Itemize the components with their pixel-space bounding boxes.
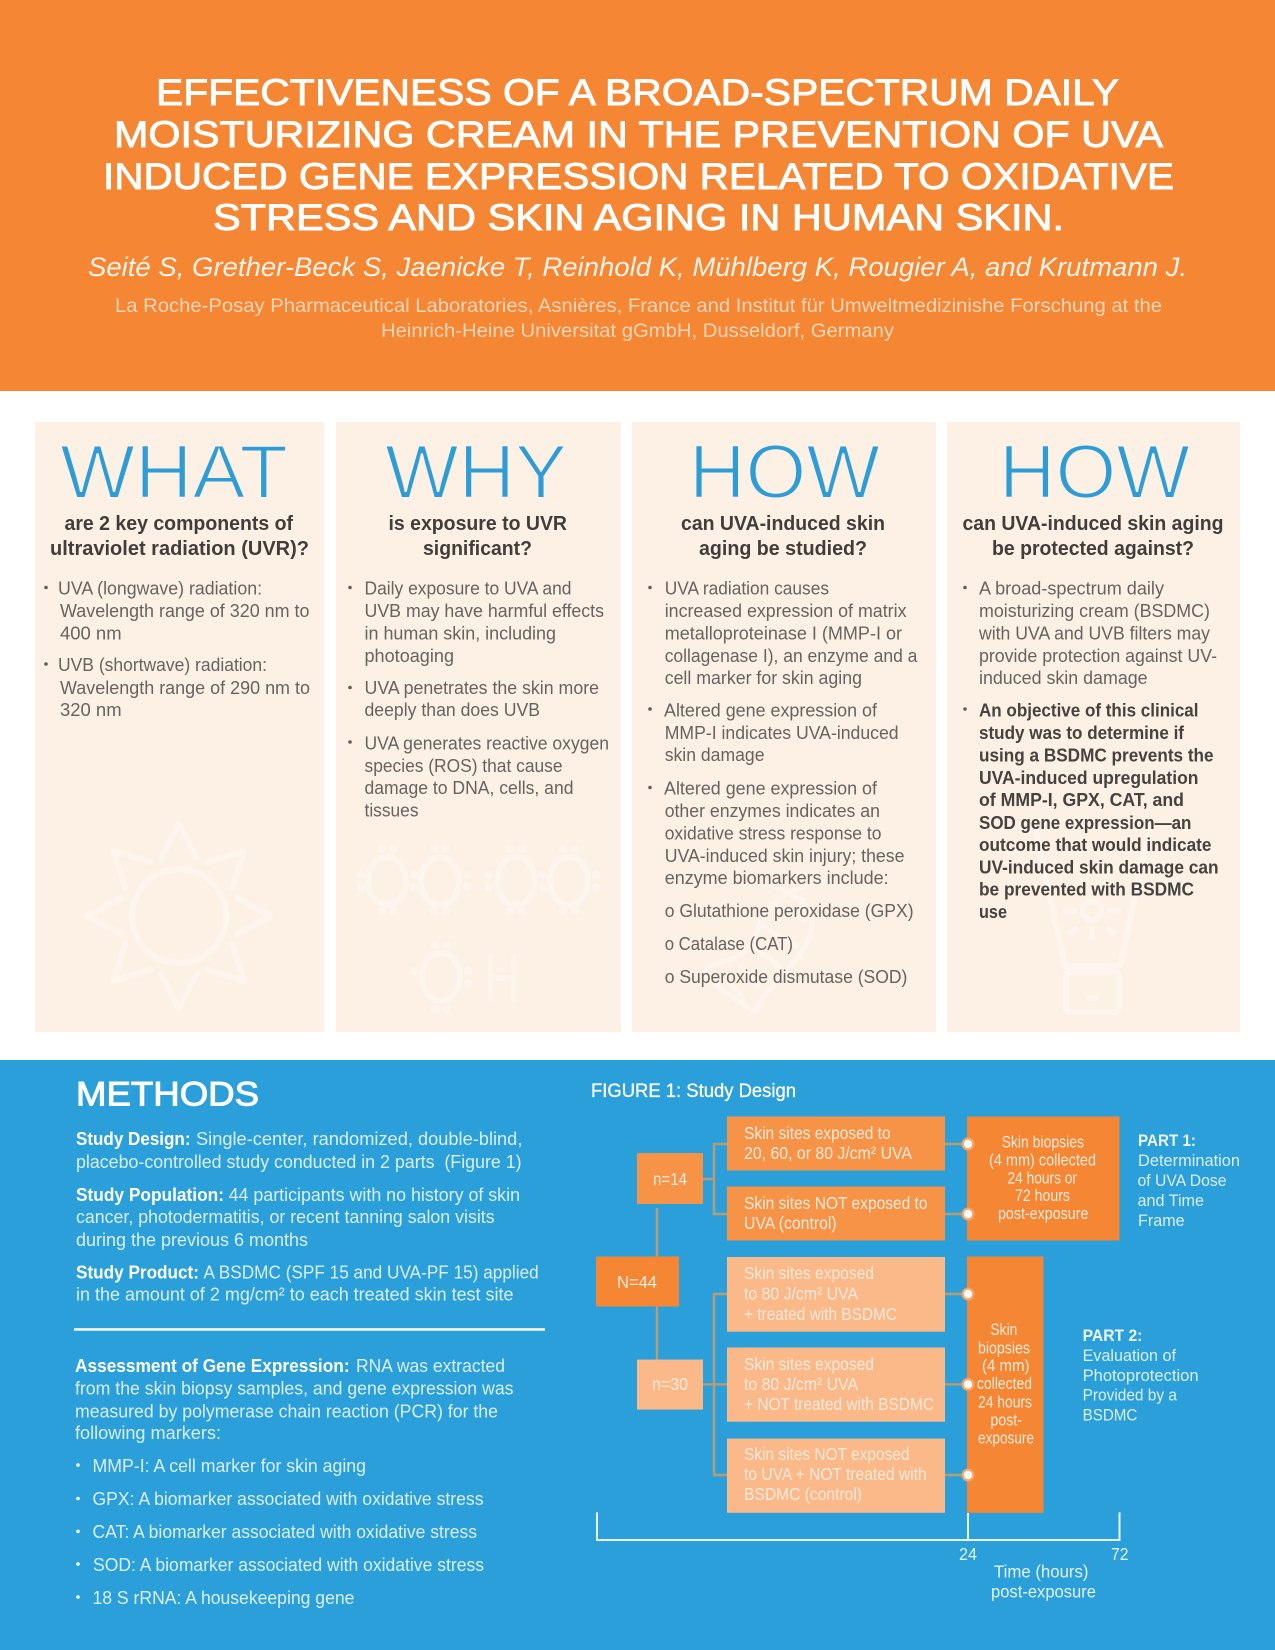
header banner xyxy=(0,0,1275,391)
icon: oxygen and hydroxyl molecules: H xyxy=(484,941,520,1017)
bullet list: 320 nm xyxy=(60,699,122,720)
bullet list: An objective of this clinical xyxy=(979,700,1198,720)
bullet list: enzyme biomarkers include: xyxy=(665,867,889,888)
bullet list: damage to DNA, cells, and xyxy=(364,777,574,798)
box: part 2 biopsies: (4 mm) xyxy=(982,1357,1030,1375)
bullet list: UVA-induced skin injury; these xyxy=(665,845,904,866)
label: part 1 xyxy=(1138,1132,1240,1230)
study product: A BSDMC (SPF 15 and UVA-PF 15) applied xyxy=(204,1262,539,1282)
heading: why: WHY xyxy=(385,430,567,515)
box: part 2 biopsies xyxy=(967,1256,1044,1513)
heading: how: HOW xyxy=(689,430,880,515)
label: part 2: BSDMC xyxy=(1083,1406,1137,1424)
bullet list: UVA-induced upregulation xyxy=(979,767,1198,788)
label: part 2: Photoprotection xyxy=(1083,1367,1199,1385)
bullet list: tissues xyxy=(364,800,418,820)
icon: oxygen and hydroxyl molecules xyxy=(357,845,600,1017)
bullet list: SOD gene expression—an xyxy=(979,812,1191,833)
heading: how: HOW xyxy=(999,430,1190,515)
bullet list xyxy=(44,578,310,720)
box: part 2 biopsies: Skin xyxy=(990,1321,1017,1339)
connector dots xyxy=(962,1138,974,1482)
panel: how studied xyxy=(632,422,936,1032)
subheading xyxy=(388,513,568,560)
box: not treated with BSDMC: to 80 J/cm² UVA xyxy=(744,1374,858,1394)
bullet list: skin damage xyxy=(665,744,764,765)
box: exposed doses xyxy=(727,1116,945,1170)
title: EFFECTIVENESS OF A BROAD-SPECTRUM DAILY xyxy=(156,72,1119,113)
label: part 2: Evaluation of xyxy=(1083,1347,1176,1365)
title: MOISTURIZING CREAM IN THE PREVENTION OF UVA xyxy=(114,114,1163,155)
bullet list: Altered gene expression of xyxy=(664,778,878,798)
box: part 1 biopsies: 24 hours or xyxy=(1008,1169,1077,1187)
bullet list: oxidative stress response to xyxy=(665,822,882,844)
label: part 1: Frame xyxy=(1138,1212,1185,1230)
icon: sun xyxy=(87,824,271,1008)
box: not treated with BSDMC xyxy=(727,1348,945,1422)
authors: Seité S, Grether-Beck S, Jaenicke T, Reinhold K, Mühlberg K, Rougier A, and Krutmann J. xyxy=(88,252,1187,282)
box: n=14 xyxy=(637,1153,703,1204)
bullet list: induced skin damage xyxy=(979,667,1148,688)
bullet list: o Glutathione peroxidase (GPX) xyxy=(665,900,914,921)
bullet list: provide protection against UV- xyxy=(979,645,1217,666)
label: part 1: Determination xyxy=(1138,1152,1240,1170)
bullet list xyxy=(348,578,609,820)
heading: what: WHAT xyxy=(60,430,288,515)
study product: in the amount of 2 mg/cm² to each treated skin test site xyxy=(76,1284,514,1305)
bullet list: study was to determine if xyxy=(979,722,1185,743)
box: n=14: n=14 xyxy=(653,1169,687,1189)
box: not exposed control: UVA (control) xyxy=(744,1213,837,1233)
box: treated with BSDMC xyxy=(727,1257,945,1332)
marker list: 18 S rRNA: A housekeeping gene xyxy=(92,1587,354,1608)
bullet list: be prevented with BSDMC xyxy=(979,878,1194,900)
study population: 44 participants with no history of skin xyxy=(229,1184,520,1205)
study population xyxy=(76,1184,520,1250)
time axis: 72 xyxy=(1111,1544,1128,1564)
box: n=30: n=30 xyxy=(652,1374,688,1394)
subheading: aging be studied? xyxy=(699,538,867,560)
assessment of gene expression: measured by polymerase chain reaction (PCR) for the xyxy=(75,1400,498,1421)
subheading: is exposure to UVR xyxy=(388,513,568,535)
bullet list: 400 nm xyxy=(60,622,122,644)
study design xyxy=(76,1128,522,1172)
box: part 1 biopsies xyxy=(967,1116,1120,1240)
label: part 1: and Time xyxy=(1138,1192,1204,1210)
affiliations: Heinrich-Heine Universitat gGmbH, Dusseldorf, Germany xyxy=(381,320,894,342)
box: untreated control: to UVA + NOT treated with xyxy=(744,1464,927,1484)
bullet list: Wavelength range of 320 nm to xyxy=(60,600,310,621)
study population: Study Population: xyxy=(76,1184,224,1205)
subheading: can UVA-induced skin aging xyxy=(962,513,1224,535)
box: not exposed control xyxy=(727,1186,945,1240)
study population: during the previous 6 months xyxy=(76,1229,308,1250)
study population: cancer, photodermatitis, or recent tanning salon visits xyxy=(76,1206,495,1227)
bullet list: UVA penetrates the skin more xyxy=(364,677,599,698)
figure title: FIGURE 1: Study Design xyxy=(591,1081,796,1102)
assessment of gene expression: RNA was extracted xyxy=(356,1355,505,1376)
bullet list: species (ROS) that cause xyxy=(364,755,562,776)
time axis: post-exposure xyxy=(991,1582,1096,1602)
bullet list: UVA generates reactive oxygen xyxy=(364,732,609,754)
title: INDUCED GENE EXPRESSION RELATED TO OXIDATIVE xyxy=(103,156,1174,197)
bullet list: other enzymes indicates an xyxy=(665,800,880,821)
box: n=30 xyxy=(637,1360,703,1410)
assessment of gene expression: following markers: xyxy=(75,1422,221,1443)
study design: placebo-controlled study conducted in 2 parts (Figure 1) xyxy=(76,1151,522,1172)
bullet list: photoaging xyxy=(364,645,454,666)
subheading: ultraviolet radiation (UVR)? xyxy=(50,538,309,560)
study product xyxy=(76,1262,539,1305)
assessment of gene expression xyxy=(75,1355,514,1443)
box: treated with BSDMC: + treated with BSDMC xyxy=(744,1304,897,1324)
bullet list xyxy=(963,578,1219,922)
panel: why xyxy=(336,422,621,1032)
box: exposed doses: 20, 60, or 80 J/cm² UVA xyxy=(744,1143,912,1163)
methods section xyxy=(0,1060,1275,1650)
bullet list: moisturizing cream (BSDMC) xyxy=(979,600,1210,621)
bullet list: UVB (shortwave) radiation: xyxy=(58,654,267,675)
subheading xyxy=(962,513,1224,560)
bullet list: UV-induced skin damage can xyxy=(979,856,1219,878)
box: untreated control xyxy=(727,1439,945,1513)
box: N=44: N=44 xyxy=(617,1272,657,1292)
panel: what xyxy=(35,422,324,1032)
bullet list: UVB may have harmful effects xyxy=(364,600,604,621)
bullet list: cell marker for skin aging xyxy=(665,667,862,688)
marker list xyxy=(76,1455,484,1608)
time axis: 24 xyxy=(959,1544,977,1564)
affiliations xyxy=(115,295,1162,342)
bullet list: deeply than does UVB xyxy=(364,699,540,720)
box: part 2 biopsies: biopsies xyxy=(978,1340,1030,1358)
subheading: be protected against? xyxy=(992,538,1194,560)
label: part 2 xyxy=(1083,1327,1199,1424)
box: untreated control: BSDMC (control) xyxy=(744,1484,862,1504)
bullet list: Daily exposure to UVA and xyxy=(364,578,572,598)
box: part 1 biopsies: (4 mm) collected xyxy=(989,1151,1096,1169)
time axis: Time (hours) xyxy=(994,1562,1088,1582)
subheading xyxy=(50,513,309,560)
bullet list: with UVA and UVB filters may xyxy=(978,622,1211,644)
box: part 2 biopsies: collected xyxy=(977,1375,1032,1393)
box: not treated with BSDMC: Skin sites exposed xyxy=(744,1354,874,1374)
marker list: SOD: A biomarker associated with oxidative stress xyxy=(93,1554,484,1575)
figure: study design flowchart xyxy=(591,1081,1240,1602)
assessment of gene expression: from the skin biopsy samples, and gene expression was xyxy=(75,1377,514,1398)
connectors xyxy=(657,1144,967,1475)
box: part 2 biopsies: exposure xyxy=(978,1430,1034,1448)
bullet list: in human skin, including xyxy=(364,622,556,644)
box: treated with BSDMC: to 80 J/cm² UVA xyxy=(744,1283,858,1303)
title: STRESS AND SKIN AGING IN HUMAN SKIN. xyxy=(213,197,1064,238)
study design: Study Design: xyxy=(76,1128,190,1149)
box: N=44 xyxy=(596,1256,679,1306)
box: not exposed control: Skin sites NOT exposed to xyxy=(744,1193,928,1213)
box: untreated control: Skin sites NOT exposed xyxy=(744,1444,910,1464)
icon: dna helix xyxy=(705,882,823,1012)
panel: how protected xyxy=(947,422,1240,1032)
marker list: GPX: A biomarker associated with oxidative stress xyxy=(92,1488,484,1509)
label: part 2: Provided by a xyxy=(1083,1387,1178,1405)
title xyxy=(103,72,1174,238)
marker list: CAT: A biomarker associated with oxidative stress xyxy=(92,1521,477,1542)
heading: methods: METHODS xyxy=(76,1076,259,1114)
bullet list: metalloproteinase I (MMP-I or xyxy=(665,622,902,644)
bullet list: of MMP-I, GPX, CAT, and xyxy=(979,789,1184,810)
icon: sunscreen bottle xyxy=(1036,832,1149,1012)
bullet list: collagenase I), an enzyme and a xyxy=(665,645,918,666)
bullet list: Altered gene expression of xyxy=(664,700,878,720)
box: part 1 biopsies: post-exposure xyxy=(998,1205,1088,1223)
box: part 1 biopsies: 72 hours xyxy=(1015,1187,1070,1205)
bullet list: Wavelength range of 290 nm to xyxy=(60,677,310,698)
bullet list: UVA (longwave) radiation: xyxy=(58,578,262,598)
study product: Study Product: xyxy=(76,1262,199,1282)
bullet list: o Catalase (CAT) xyxy=(665,933,793,954)
label: part 1: of UVA Dose xyxy=(1138,1172,1226,1190)
label: part 1: PART 1: xyxy=(1138,1132,1196,1150)
bullet list: MMP-I indicates UVA-induced xyxy=(665,722,899,743)
subheading: are 2 key components of xyxy=(64,513,293,535)
bullet list: using a BSDMC prevents the xyxy=(979,744,1214,766)
assessment of gene expression: Assessment of Gene Expression: xyxy=(75,1355,350,1376)
bullet list: UVA radiation causes xyxy=(665,578,829,598)
bullet list xyxy=(648,578,918,987)
bullet list: A broad-spectrum daily xyxy=(979,578,1165,598)
bullet list: o Superoxide dismutase (SOD) xyxy=(665,966,907,987)
bullet list: use xyxy=(979,901,1007,922)
subheading xyxy=(681,513,885,560)
time axis xyxy=(597,1512,1128,1602)
study design: Single-center, randomized, double-blind, xyxy=(196,1128,522,1149)
box: treated with BSDMC: Skin sites exposed xyxy=(744,1263,874,1283)
subheading: can UVA-induced skin xyxy=(681,513,885,535)
box: not treated with BSDMC: + NOT treated with BSDMC xyxy=(744,1394,934,1414)
affiliations: La Roche-Posay Pharmaceutical Laboratories, Asnières, France and Institut für Umweltmedizinishe Forschung at the xyxy=(115,295,1162,317)
box: exposed doses: Skin sites exposed to xyxy=(744,1123,891,1143)
box: part 2 biopsies: 24 hours xyxy=(978,1393,1032,1411)
marker list: MMP-I: A cell marker for skin aging xyxy=(92,1455,366,1476)
subheading: significant? xyxy=(423,538,532,560)
box: part 2 biopsies: post- xyxy=(990,1411,1022,1429)
bullet list: outcome that would indicate xyxy=(979,834,1212,855)
label: part 2: PART 2: xyxy=(1083,1327,1142,1345)
box: part 1 biopsies: Skin biopsies xyxy=(1002,1133,1084,1151)
bullet list: increased expression of matrix xyxy=(665,600,907,621)
